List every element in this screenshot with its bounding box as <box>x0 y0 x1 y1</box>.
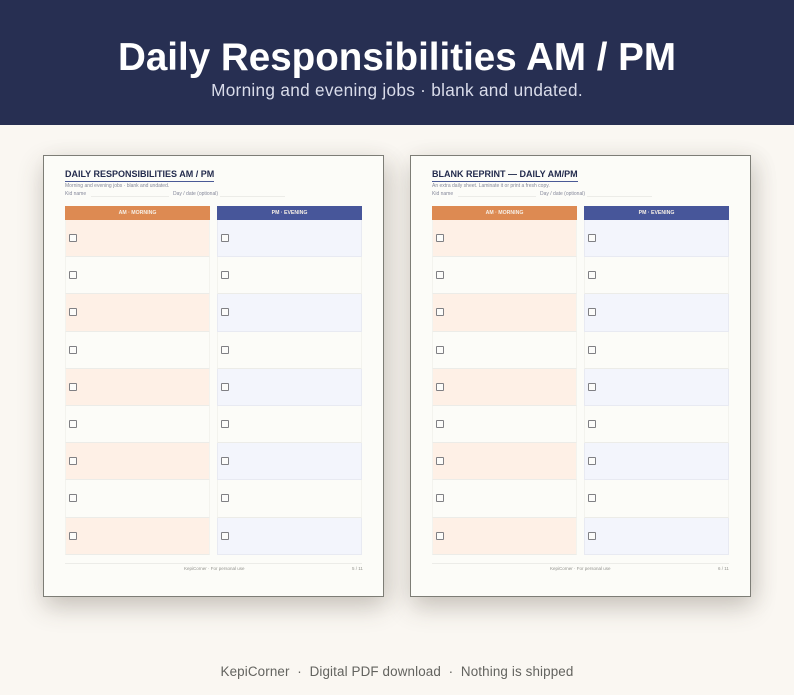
sheet 1 description: Morning and evening jobs · blank and undated. <box>65 183 169 189</box>
sheet 2 page number: 6 / 11 <box>718 566 729 571</box>
sheet 1 heading: DAILY RESPONSIBILITIES AM / PM <box>65 169 214 179</box>
sheet 1 AM rows <box>65 220 210 555</box>
header banner <box>0 0 794 125</box>
sheet 1 footer text: KepiCorner · For personal use <box>184 566 245 571</box>
subtitle: Morning and evening jobs · blank and undated. <box>211 80 583 100</box>
sheet 1 PM rows <box>217 220 362 555</box>
sheet 2 AM rows <box>432 220 577 555</box>
sheet 2 PM rows <box>584 220 729 555</box>
sheet 1 PM column header <box>217 206 362 220</box>
sheet 2 PM column header: PM · EVENING <box>639 210 674 216</box>
sheet 2 day field: Day / date (optional) <box>540 191 585 197</box>
sheet 2 AM column header <box>432 206 577 220</box>
sheet 2 PM column header <box>584 206 729 220</box>
sheet 2 kid name field: Kid name <box>432 191 453 197</box>
panel: sheet 1 daily responsibilities <box>43 155 384 597</box>
sheet 2 AM column header: AM · MORNING <box>486 210 523 216</box>
sheet 1 PM column header: PM · EVENING <box>272 210 307 216</box>
sheet 2 description: An extra daily sheet. Laminate it or print a fresh copy. <box>432 183 550 189</box>
sheet 2 footer text: KepiCorner · For personal use <box>550 566 611 571</box>
sheet 2 heading: BLANK REPRINT — DAILY AM/PM <box>432 169 578 179</box>
sheet 1 page number: 5 / 11 <box>352 566 363 571</box>
sheet 1 day field: Day / date (optional) <box>173 191 218 197</box>
bottom caption: KepiCorner · Digital PDF download · Nothing is shipped <box>221 664 573 679</box>
title: Daily Responsibilities AM / PM <box>118 36 676 79</box>
sheet 1 AM column header: AM · MORNING <box>119 210 156 216</box>
panel: sheet 2 blank reprint <box>410 155 751 597</box>
sheet 1 AM column header <box>65 206 210 220</box>
sheet 1 kid name field: Kid name <box>65 191 86 197</box>
